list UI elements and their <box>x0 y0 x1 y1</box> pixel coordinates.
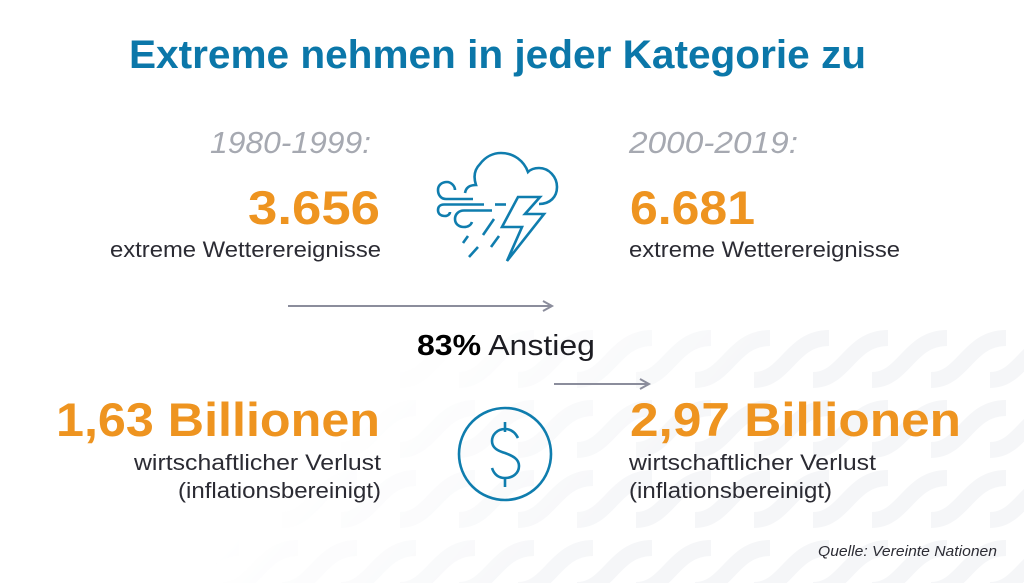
panel: economic loss left <box>56 393 381 503</box>
panel: weather events 2000-2019 <box>628 125 900 262</box>
value 3.656: 3.656 <box>248 181 380 234</box>
title: Extreme nehmen in jeder Kategorie zu <box>129 33 866 77</box>
panel: weather events 1980-1999 <box>110 125 381 262</box>
description: extreme Wetterereignisse <box>110 237 381 262</box>
description line 2: (inflationsbereinigt) <box>178 478 381 503</box>
period label 1980-1999: 1980-1999: <box>210 125 371 160</box>
arrow: upper <box>288 301 552 311</box>
arrow: lower <box>554 379 649 389</box>
callout: 83% increase: 83% Anstieg <box>417 330 595 362</box>
icon: dollar in circle <box>459 408 551 500</box>
value 1,63 Billionen: 1,63 Billionen <box>56 393 380 446</box>
description: wirtschaftlicher Verlust <box>133 450 381 475</box>
source note: Quelle: Vereinte Nationen <box>818 544 997 560</box>
value 2,97 Billionen: 2,97 Billionen <box>630 393 961 446</box>
description: extreme Wetterereignisse <box>629 237 900 262</box>
panel: economic loss right <box>628 393 961 503</box>
icon: storm cloud with wind, rain and lightning <box>438 153 557 261</box>
value 6.681: 6.681 <box>630 181 755 234</box>
description line 2: (inflationsbereinigt) <box>629 478 832 503</box>
description: wirtschaftlicher Verlust <box>628 450 876 475</box>
period label 2000-2019: 2000-2019: <box>628 125 798 160</box>
